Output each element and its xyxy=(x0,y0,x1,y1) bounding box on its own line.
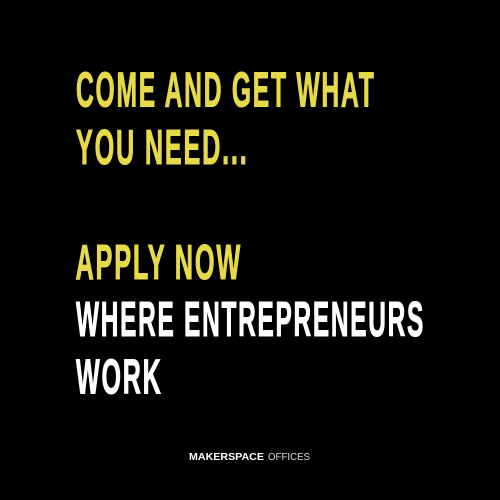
call to action: apply now: APPLY NOW xyxy=(76,235,242,290)
tagline: where entrepreneurs work xyxy=(76,292,425,404)
footer brand: makerspace offices: OFFICES xyxy=(268,452,310,463)
tagline: where entrepreneurs work: WORK xyxy=(76,350,162,404)
footer brand: makerspace offices xyxy=(189,452,310,463)
heading: come and get what you need xyxy=(76,62,376,175)
heading: come and get what you need: YOU NEED... xyxy=(76,120,249,175)
footer brand: makerspace offices: MAKERSPACE xyxy=(189,452,264,463)
